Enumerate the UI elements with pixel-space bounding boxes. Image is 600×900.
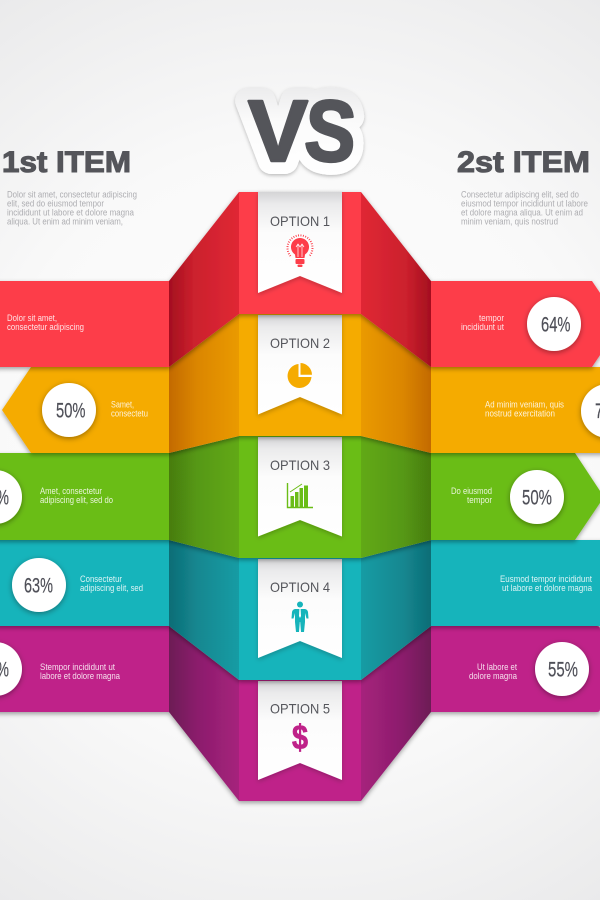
icon: person <box>292 602 308 632</box>
panel: option 5 magenta band <box>0 626 600 801</box>
text block: 2st item description: Consectetur adipiscing elit, sed do <box>461 190 579 200</box>
right label: orange <box>485 400 564 418</box>
text block: 1st item description: incididunt ut labore et dolore magna <box>7 208 134 218</box>
text block: 1st item description: aliqua. Ut enim ad minim veniam, <box>7 216 123 226</box>
heading: 2st item: 2st ITEM <box>457 146 590 179</box>
left label: red: Dolor sit amet, <box>7 313 57 323</box>
percent circle: green left <box>0 470 22 524</box>
percent circle: orange left: 50% <box>56 400 86 422</box>
VS sticker badge <box>248 81 359 182</box>
right label: red <box>461 313 504 332</box>
icon: pie chart <box>288 363 312 388</box>
icon: dollar sign: $ <box>292 719 308 757</box>
right label: magenta: dolore magna <box>469 671 517 681</box>
ribbon: option 4 <box>258 559 342 658</box>
right label: magenta <box>469 662 517 681</box>
right label: orange: Ad minim veniam, quis <box>485 400 564 410</box>
text block: 1st item description <box>7 190 137 226</box>
VS sticker badge: S <box>302 81 359 182</box>
ribbon: option 5: OPTION 5 <box>270 700 330 716</box>
percent circle: teal left: 63% <box>24 574 53 598</box>
left label: teal: Consectetur <box>80 574 122 584</box>
text block: 1st item description: elit, sed do eiusmod tempor <box>7 198 104 208</box>
panel: option 4 teal band <box>0 540 600 680</box>
panel: option 3 green band <box>0 436 600 558</box>
VS sticker badge: S <box>302 81 359 182</box>
left label: magenta <box>40 662 120 681</box>
ribbon: option 3 <box>258 437 342 536</box>
right label: green: tempor <box>467 495 492 505</box>
icon: growth chart <box>288 483 313 508</box>
percent circle: magenta right <box>535 642 589 696</box>
left label: green <box>40 486 113 505</box>
text block: 2st item description: minim veniam, quis nostrud <box>461 216 558 226</box>
left label: green: adipiscing elit, sed do <box>40 495 113 505</box>
left label: magenta: Stempor incididunt ut <box>40 662 115 672</box>
text block: 1st item description: Dolor sit amet, consectetur adipiscing <box>7 190 137 200</box>
ribbon: option 3: OPTION 3 <box>270 457 330 473</box>
right label: green <box>451 486 492 505</box>
percent circle: magenta left <box>0 642 22 696</box>
left label: teal <box>80 574 143 593</box>
left label: orange: Samet, <box>111 400 134 410</box>
right label: teal <box>500 574 592 593</box>
right label: red: tempor <box>479 313 504 323</box>
left label: red <box>7 313 84 332</box>
heading: 1st item: 1st ITEM <box>2 146 131 179</box>
percent circle: red right: 64% <box>541 314 570 336</box>
left label: orange <box>111 400 148 418</box>
panel: option 2 orange band <box>2 314 600 453</box>
ribbon: option 5 <box>258 681 342 780</box>
panel: option 1 red band <box>0 192 600 367</box>
left label: orange: consectetu <box>111 408 148 418</box>
ribbon: option 1: OPTION 1 <box>270 213 330 229</box>
percent circle: green right <box>510 470 564 524</box>
percent circle: teal left <box>12 558 66 612</box>
right label: red: incididunt ut <box>461 322 504 332</box>
icon: light bulb <box>288 235 313 267</box>
text block: 2st item description <box>461 190 588 226</box>
left label: green: Amet, consectetur <box>40 486 102 496</box>
VS sticker badge: V <box>248 83 308 180</box>
ribbon: option 2 <box>258 315 342 414</box>
text block: 2st item description: eiusmod tempor incididunt ut labore <box>461 198 588 208</box>
left label: teal: adipiscing elit, sed <box>80 583 143 593</box>
ribbon: option 1 <box>258 192 342 293</box>
VS sticker badge: V <box>248 83 308 180</box>
left label: red: consectetur adipiscing <box>7 322 84 332</box>
right label: magenta: Ut labore et <box>477 662 517 672</box>
percent circle: orange left <box>42 383 96 437</box>
percent circle: orange right <box>581 384 600 438</box>
percent circle: magenta right: 55% <box>548 658 578 682</box>
left label: magenta: labore et dolore magna <box>40 671 120 681</box>
ribbon: option 2: OPTION 2 <box>270 335 330 351</box>
ribbon: option 4: OPTION 4 <box>270 579 330 595</box>
right label: orange: nostrud exercitation <box>485 408 555 418</box>
right label: green: Do eiusmod <box>451 486 492 496</box>
percent circle: red right <box>527 297 581 351</box>
percent circle: green right: 50% <box>522 486 552 510</box>
text block: 2st item description: et dolore magna aliqua. Ut enim ad <box>461 208 583 218</box>
